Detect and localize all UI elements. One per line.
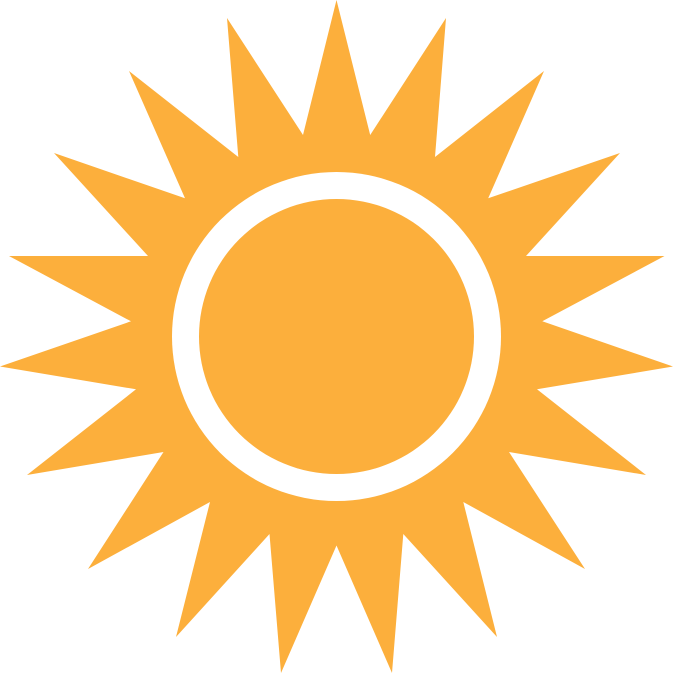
white ring [172, 172, 501, 501]
sun core [199, 199, 474, 474]
